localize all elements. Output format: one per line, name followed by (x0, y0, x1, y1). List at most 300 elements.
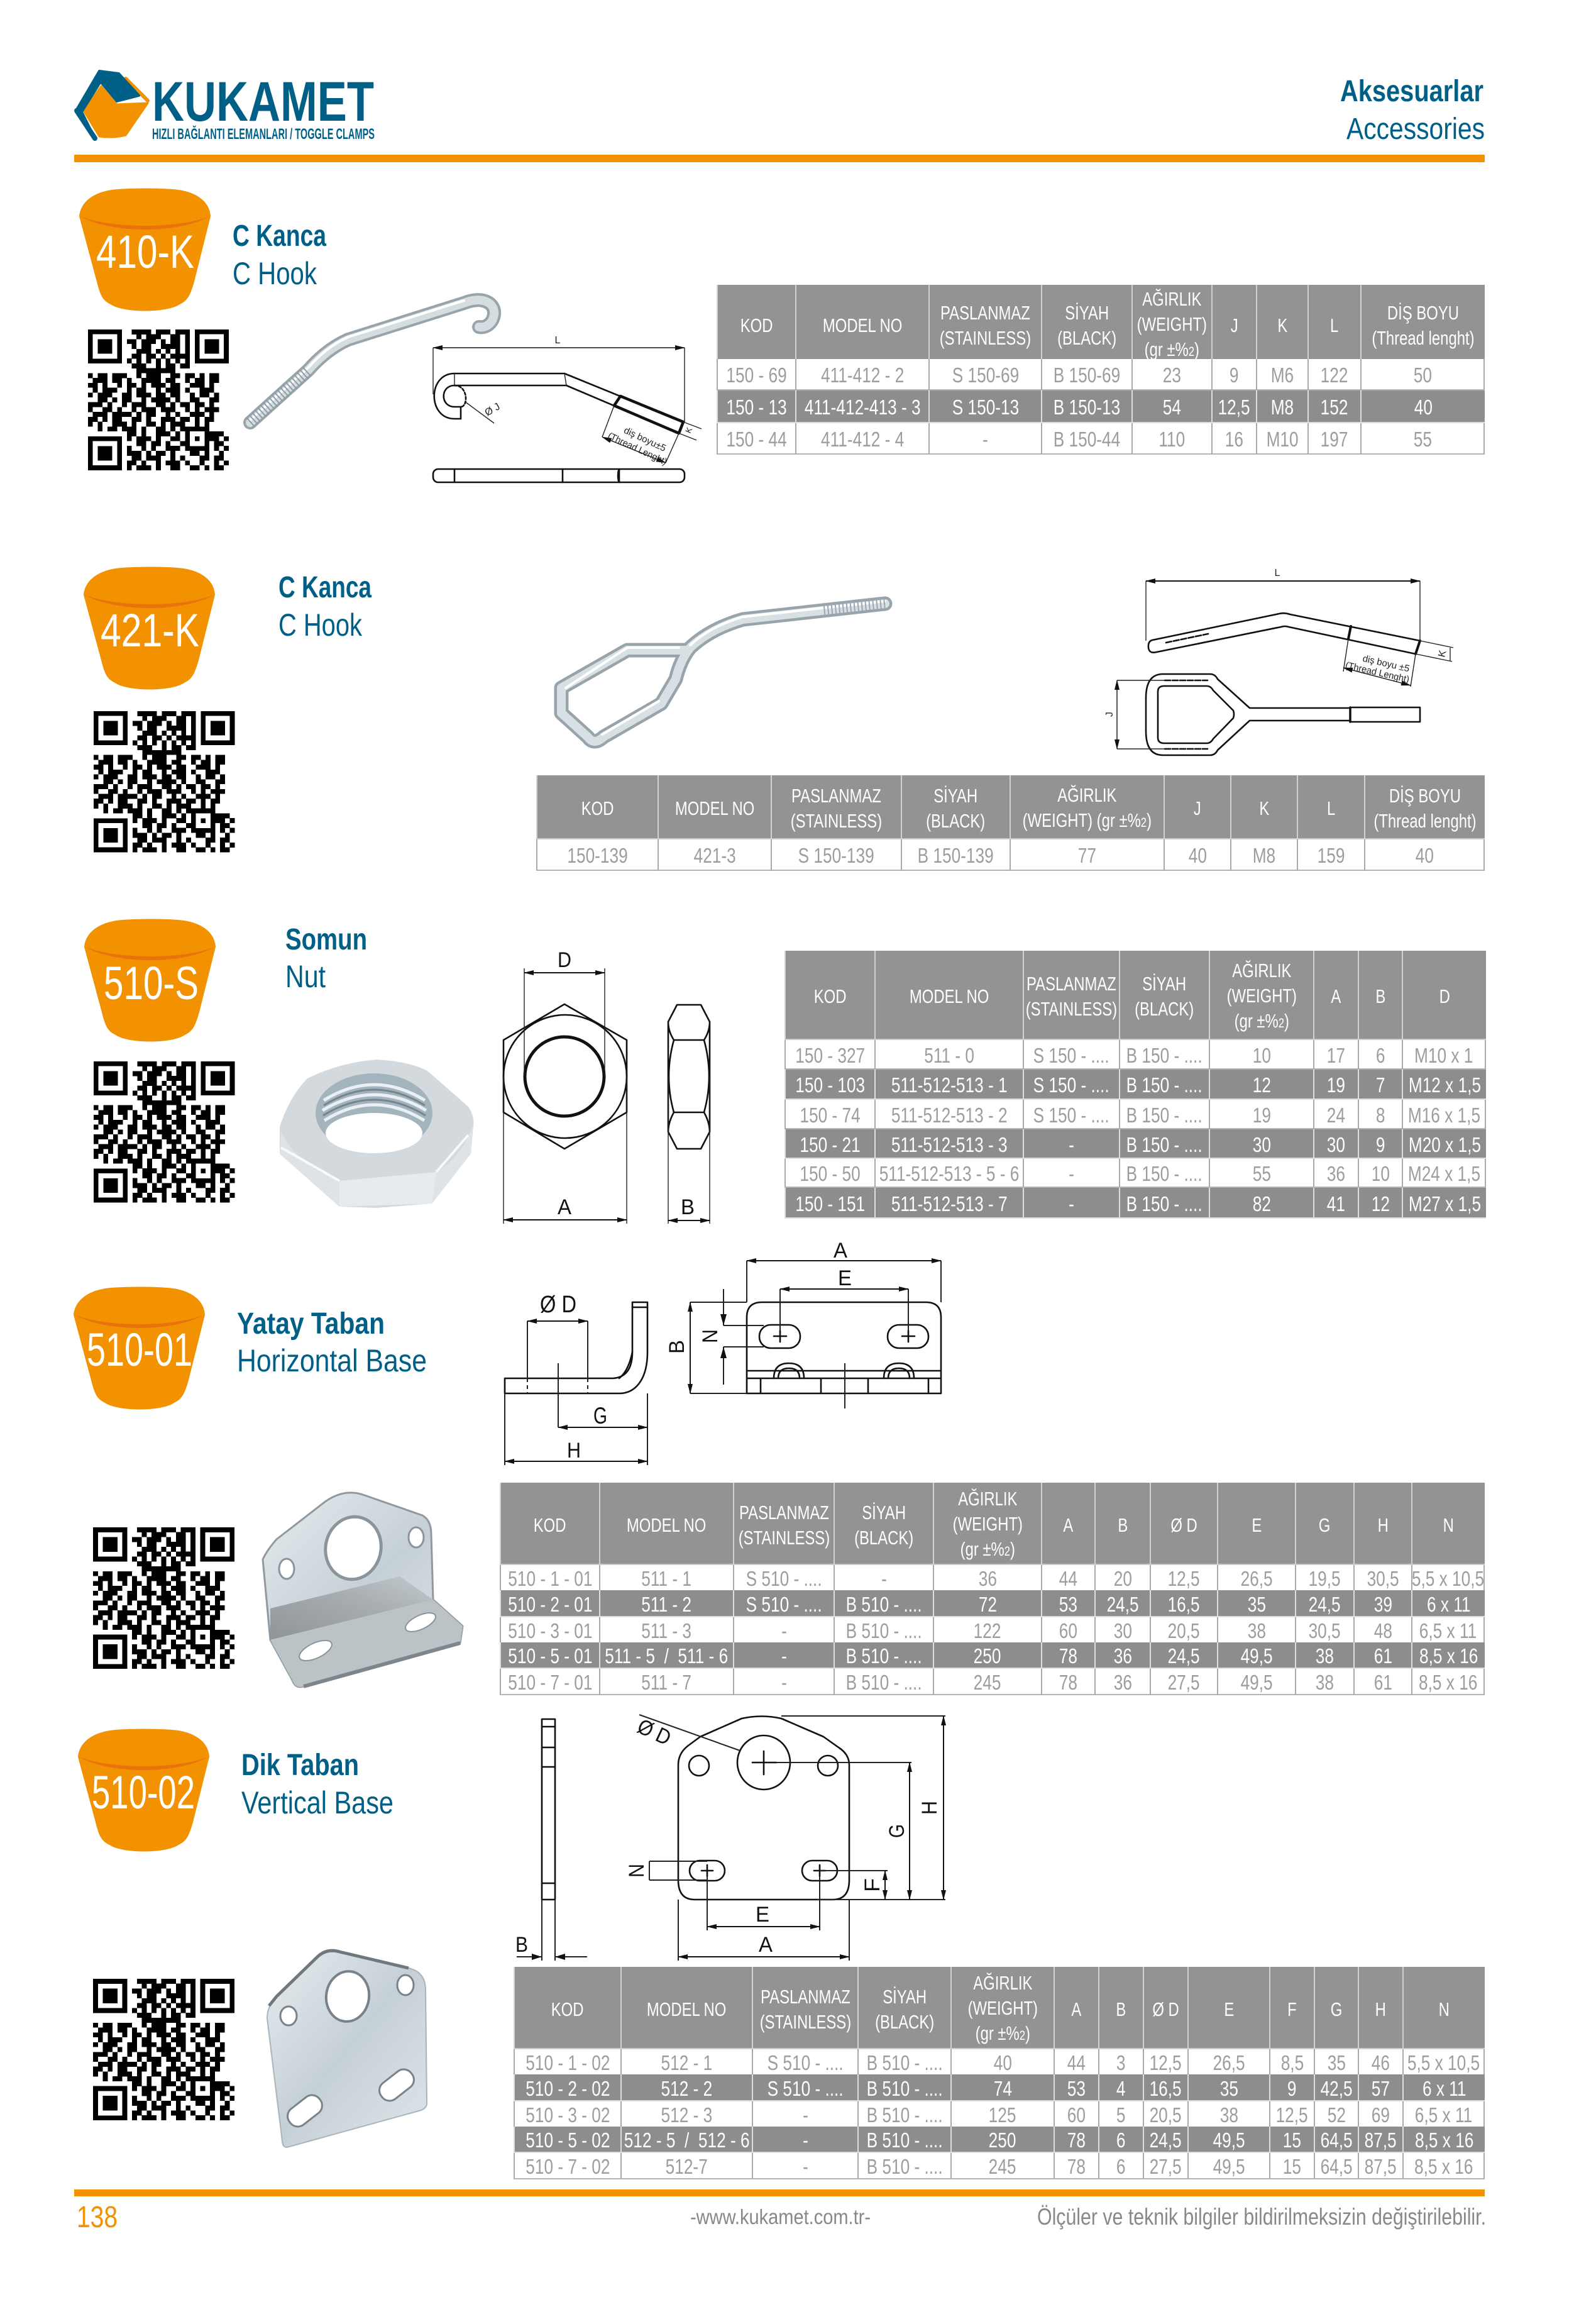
table row: 40 (1414, 396, 1433, 419)
table row: 44 (1067, 2051, 1086, 2074)
table row: 512 - 3 (661, 2103, 712, 2127)
table row: 6 x 11 (1427, 1592, 1470, 1616)
table header row: E (1224, 1998, 1234, 2020)
drawing: triangular hook: diş boyu ±5 (1362, 653, 1411, 674)
photo: triangular hook (561, 601, 885, 741)
table header row: KOD (551, 1998, 584, 2020)
table row: 35 (1327, 2051, 1346, 2074)
table row: 511-512-513 - 1 (891, 1073, 1007, 1097)
table header row (536, 775, 1485, 839)
table row: 5,5 x 10,5 (1407, 2051, 1480, 2074)
table header row: D (1439, 985, 1450, 1007)
table row: 12,5 (1276, 2103, 1308, 2127)
table row: 82 (1252, 1192, 1271, 1215)
brand name: KUKAMET (152, 70, 374, 133)
table row: 159 (1318, 844, 1345, 867)
drawing: horizontal base front view (665, 1239, 941, 1408)
table header row: N (1443, 1514, 1454, 1536)
table row (784, 1188, 1486, 1219)
table row: S 150 - .... (1033, 1044, 1109, 1066)
section: 510-02 (78, 1714, 945, 2147)
drawing: C hook: diş boyu±5 (622, 425, 668, 454)
product title (233, 219, 326, 291)
drawing: C hook: (Thread Lenght) (606, 431, 669, 467)
table row: 10 (1371, 1162, 1390, 1185)
table row: 16,5 (1150, 2076, 1182, 2100)
table header row (514, 1967, 1485, 2049)
table row: - (803, 2155, 808, 2178)
website: -www.kukamet.com.tr- (690, 2205, 871, 2228)
table row: B 150 - .... (1126, 1044, 1203, 1066)
drawing: vertical base: N (625, 1864, 649, 1878)
table row: 122 (974, 1619, 1001, 1642)
table row: 39 (1373, 1592, 1392, 1616)
table row (500, 1642, 1485, 1669)
table row: 150 - 44 (726, 428, 787, 451)
badge: 410-K: 410-K (96, 226, 194, 278)
table header row: (STAINLESS) (1026, 998, 1117, 1020)
table row: 150 - 327 (795, 1044, 865, 1066)
table row: 64,5 (1320, 2128, 1353, 2152)
table row: 411-412 - 2 (821, 363, 904, 387)
table row: 510 - 5 - 01 (508, 1644, 592, 1668)
drawing: C hook (433, 335, 702, 482)
table row: 6,5 x 11 (1415, 2103, 1472, 2127)
table row: M24 x 1,5 (1407, 1162, 1480, 1185)
table row: 49,5 (1213, 2155, 1245, 2178)
table row: 12,5 (1218, 396, 1250, 419)
table row: 12 (1252, 1073, 1271, 1097)
table row: 26,5 (1213, 2051, 1245, 2074)
table row: S 150-13 (952, 396, 1019, 419)
table row: - (1069, 1133, 1074, 1156)
table header row: N (1439, 1998, 1450, 2020)
table row: S 510 - .... (767, 2076, 844, 2100)
table header row: B (1118, 1514, 1128, 1536)
table row: 9 (1376, 1133, 1385, 1156)
table: 510-01 (500, 1483, 1485, 1695)
table header row: (Thread lenght) (1372, 327, 1475, 348)
drawing: triangular hook: L (1275, 568, 1280, 578)
table row: 511-512-513 - 2 (891, 1103, 1007, 1127)
table row: 510 - 3 - 02 (526, 2103, 610, 2127)
table row: 197 (1321, 428, 1348, 451)
table row: 87,5 (1365, 2155, 1397, 2178)
table row: 35 (1219, 2076, 1238, 2100)
table row: 510 - 1 - 01 (508, 1567, 592, 1590)
table row: M10 (1266, 428, 1299, 451)
photo: vertical base (267, 1951, 427, 2147)
table row: 61 (1373, 1671, 1392, 1694)
table header row: AĞIRLIK (973, 1972, 1032, 1994)
badge: 510-01 (74, 1287, 205, 1410)
table row: 122 (1321, 363, 1348, 387)
QR code (93, 1527, 234, 1669)
table row: 110 (1159, 428, 1185, 451)
table row: - (1069, 1192, 1074, 1215)
table row: 150 - 151 (795, 1192, 865, 1215)
table header row: (BLACK) (926, 810, 986, 832)
table row: 512 - 2 (661, 2076, 712, 2100)
table row: 19 (1252, 1103, 1271, 1127)
table row: 19,5 (1309, 1567, 1341, 1590)
drawing: horizontal base front view: A (834, 1239, 847, 1263)
table row: 510 - 7 - 02 (526, 2155, 610, 2178)
table row: - (781, 1644, 786, 1668)
table header row: K (1259, 797, 1269, 819)
table row: B 150 - .... (1126, 1103, 1203, 1127)
table row: 411-412-413 - 3 (805, 396, 920, 419)
table row: 48 (1373, 1619, 1392, 1642)
table row: 24,5 (1168, 1644, 1200, 1668)
table row: 8 (1376, 1103, 1385, 1127)
table row: 511 - 0 (924, 1044, 974, 1066)
table row: 78 (1067, 2155, 1086, 2178)
table header row: J (1194, 797, 1201, 819)
table row: 6 x 11 (1423, 2076, 1466, 2100)
table row (784, 1100, 1486, 1129)
table row: S 150-69 (952, 363, 1019, 387)
table row (784, 1159, 1486, 1188)
table: 510-02 (514, 1967, 1485, 2179)
product title: Vertical Base (241, 1785, 393, 1820)
drawing: triangular hook: J (1104, 712, 1115, 717)
table row: B 510 - .... (845, 1671, 922, 1694)
table row: M10 x 1 (1414, 1044, 1473, 1066)
table row (717, 390, 1485, 423)
table header row: A (1331, 985, 1341, 1007)
drawing: vertical base: A (759, 1933, 773, 1957)
photo: C hook (250, 300, 494, 423)
table row: M8 (1271, 396, 1294, 419)
page title (1340, 75, 1485, 146)
drawing: vertical base: E (756, 1903, 769, 1927)
table row: 36 (1113, 1644, 1132, 1668)
table row: 511 - 1 (642, 1567, 691, 1590)
table header row: (WEIGHT) (gr ±%2) (1023, 809, 1152, 831)
drawing: C hook: K (683, 426, 694, 434)
table row: 150 - 21 (800, 1133, 861, 1156)
table header row: AĞIRLIK (1232, 960, 1291, 981)
table row: 15 (1283, 2128, 1301, 2152)
product title: Horizontal Base (237, 1343, 427, 1378)
table row: 24,5 (1309, 1592, 1341, 1616)
table row: 8,5 x 16 (1415, 2128, 1473, 2152)
table header row: (BLACK) (1135, 998, 1194, 1020)
table row: 46 (1372, 2051, 1390, 2074)
table row: B 150-44 (1054, 428, 1120, 451)
badge: 421-K (84, 567, 215, 689)
table row: 44 (1059, 1567, 1077, 1590)
table row: 24 (1327, 1103, 1345, 1127)
table row: 40 (993, 2051, 1012, 2074)
table row: 245 (989, 2155, 1016, 2178)
table header row: J (1231, 314, 1238, 336)
table row: B 510 - .... (845, 1592, 922, 1616)
product title: Dik Taban (241, 1749, 359, 1782)
table row: - (881, 1567, 886, 1590)
drawing: nut: D (558, 948, 571, 972)
table header row: SİYAH (934, 785, 977, 807)
table row: S 510 - .... (746, 1592, 822, 1616)
table row: M12 x 1,5 (1408, 1073, 1481, 1097)
drawing: horizontal base side view: Ø D (540, 1292, 576, 1318)
table row: 30,5 (1367, 1567, 1399, 1590)
table row: 8,5 x 16 (1414, 2155, 1473, 2178)
table row: 53 (1067, 2076, 1086, 2100)
badge: 421-K: 421-K (101, 604, 199, 656)
table header row: MODEL NO (823, 314, 902, 336)
table row: - (803, 2103, 808, 2127)
table header row: (WEIGHT) (1137, 313, 1207, 335)
table row: 30 (1252, 1133, 1271, 1156)
table row: S 150-139 (798, 844, 874, 867)
table row: B 510 - .... (866, 2155, 943, 2178)
table row: 74 (993, 2076, 1012, 2100)
table row: 6 (1116, 2155, 1126, 2178)
table header row: MODEL NO (627, 1514, 707, 1536)
drawing: nut (504, 948, 710, 1224)
drawing: horizontal base front view: N (698, 1329, 722, 1343)
drawing: vertical base: F (861, 1878, 884, 1892)
table row: 17 (1327, 1044, 1345, 1066)
table row: - (781, 1619, 786, 1642)
table row: 57 (1372, 2076, 1390, 2100)
table header row: KOD (814, 985, 846, 1007)
table row (514, 2153, 1485, 2179)
table row (514, 2127, 1485, 2153)
table header row: A (1072, 1998, 1081, 2020)
table header row: (STAINLESS) (791, 810, 882, 832)
table row: 7 (1376, 1073, 1385, 1097)
product title: Somun (285, 923, 367, 956)
page title: Aksesuarlar (1340, 75, 1483, 108)
table row: 510 - 2 - 02 (526, 2076, 610, 2100)
table row: 24,5 (1150, 2128, 1182, 2152)
table row: S 510 - .... (746, 1567, 822, 1590)
table header row: (BLACK) (875, 2011, 934, 2032)
table row: B 150 - .... (1126, 1133, 1203, 1156)
table row: B 510 - .... (845, 1644, 922, 1668)
drawing: vertical base: H (918, 1801, 942, 1815)
table row: 512 - 1 (661, 2051, 712, 2074)
table row: 150 - 103 (795, 1073, 865, 1097)
table row: 12 (1371, 1192, 1390, 1215)
table header row: G (1319, 1514, 1331, 1536)
table header row: (STAINLESS) (738, 1527, 830, 1548)
table header row: SİYAH (883, 1986, 927, 2007)
table row: B 150-13 (1054, 396, 1120, 419)
table row: 150 - 74 (800, 1103, 861, 1127)
table row: 511-512-513 - 7 (891, 1192, 1007, 1215)
drawing: horizontal base side view: H (567, 1439, 581, 1463)
table row: 512-7 (666, 2155, 708, 2178)
table row: 78 (1059, 1644, 1077, 1668)
table header row: PASLANMAZ (1026, 973, 1116, 995)
badge: 510-S: 510-S (104, 957, 199, 1009)
table row: 52 (1327, 2103, 1346, 2127)
badge: 410-K (79, 189, 211, 311)
table row (514, 2101, 1485, 2127)
table row: 35 (1247, 1592, 1266, 1616)
table row: 421-3 (693, 844, 736, 867)
table row: 6 (1376, 1044, 1385, 1066)
table row: 510 - 2 - 01 (508, 1592, 592, 1616)
table row: 5,5 x 10,5 (1412, 1567, 1484, 1590)
table row: 511 - 7 (642, 1671, 691, 1694)
drawing: vertical base: G (885, 1824, 909, 1838)
table row: 511 - 2 (642, 1592, 691, 1616)
table row: 77 (1078, 844, 1096, 867)
table row: 27,5 (1168, 1671, 1200, 1694)
table row: 12,5 (1150, 2051, 1182, 2074)
table row: 36 (978, 1567, 997, 1590)
table row (500, 1590, 1485, 1617)
table row: B 510 - .... (845, 1619, 922, 1642)
table header row: SİYAH (1065, 302, 1109, 323)
table row: 510 - 1 - 02 (526, 2051, 610, 2074)
table row: 10 (1252, 1044, 1271, 1066)
drawing: triangular hook (1104, 568, 1453, 755)
section: 421-K (84, 567, 1453, 852)
table row: 36 (1327, 1162, 1345, 1185)
table row (514, 2049, 1485, 2074)
table header row: DİŞ BOYU (1389, 785, 1461, 807)
table row: 511 - 3 (642, 1619, 691, 1642)
QR code (94, 711, 234, 852)
table row: B 150-139 (918, 844, 994, 867)
table header row: MODEL NO (675, 797, 754, 819)
table row: 38 (1316, 1644, 1334, 1668)
table row: 30 (1113, 1619, 1132, 1642)
table header row: KOD (534, 1514, 566, 1536)
table header row: E (1252, 1514, 1262, 1536)
table header row: KOD (740, 314, 773, 336)
table row (717, 423, 1485, 455)
table row: M20 x 1,5 (1408, 1133, 1481, 1156)
table header row: L (1327, 797, 1335, 819)
drawing: horizontal base front view: B (665, 1340, 689, 1354)
table header row: (WEIGHT) (1226, 985, 1297, 1006)
table header row: H (1377, 1514, 1389, 1536)
drawing: horizontal base front view: E (838, 1266, 852, 1290)
table row: 40 (1188, 844, 1207, 867)
table row: 125 (989, 2103, 1016, 2127)
table row: 78 (1067, 2128, 1086, 2152)
table row: 4 (1116, 2076, 1126, 2100)
header rule (74, 155, 1485, 162)
table row: 9 (1230, 363, 1239, 387)
table header row: (WEIGHT) (952, 1513, 1023, 1535)
table row: 150 - 13 (726, 396, 787, 419)
badge: 510-02 (78, 1729, 209, 1851)
table header row: F (1287, 1998, 1297, 2020)
page title: Accessories (1346, 113, 1485, 146)
product title: C Hook (278, 607, 363, 643)
table row: 512 - 5 / 512 - 6 (624, 2128, 749, 2152)
table row: S 510 - .... (767, 2051, 844, 2074)
table header row: SİYAH (862, 1502, 906, 1523)
table row: 61 (1373, 1644, 1392, 1668)
table row: 511-512-513 - 5 - 6 (879, 1162, 1019, 1185)
table row: 40 (1415, 844, 1434, 867)
table row: 87,5 (1365, 2128, 1397, 2152)
table row: 510 - 7 - 01 (508, 1671, 592, 1694)
table row: 8,5 (1280, 2051, 1304, 2074)
QR code (88, 329, 229, 470)
table header row: PASLANMAZ (791, 785, 881, 807)
table row: 69 (1372, 2103, 1390, 2127)
table row: - (982, 428, 988, 451)
table row: 15 (1283, 2155, 1301, 2178)
table header row: G (1331, 1998, 1342, 2020)
table row: 20 (1113, 1567, 1132, 1590)
table row: 511 - 5 / 511 - 6 (605, 1644, 728, 1668)
table row: B 510 - .... (866, 2128, 943, 2152)
table header row: (WEIGHT) (967, 1997, 1038, 2019)
logo (76, 70, 375, 143)
drawing: horizontal base side view (505, 1292, 647, 1465)
table header row: MODEL NO (910, 985, 989, 1007)
badge: 510-01: 510-01 (87, 1324, 192, 1376)
table row: 60 (1067, 2103, 1086, 2127)
table row: 26,5 (1240, 1567, 1273, 1590)
table header row: PASLANMAZ (739, 1502, 828, 1523)
table row: - (781, 1671, 786, 1694)
table row: 64,5 (1320, 2155, 1353, 2178)
brand tagline: HIZLI BAĞLANTI ELEMANLARI / TOGGLE CLAMPS (152, 125, 375, 143)
table header row: PASLANMAZ (940, 302, 1030, 323)
table row: B 150 - .... (1126, 1162, 1203, 1185)
table: 421-K (536, 775, 1485, 871)
table: 510-S (784, 951, 1486, 1219)
table row: 3 (1116, 2051, 1126, 2074)
badge: 510-S (84, 919, 216, 1041)
product title: C Hook (233, 256, 317, 291)
table header row: L (1330, 314, 1339, 336)
table row (784, 1040, 1486, 1070)
table header row: AĞIRLIK (958, 1488, 1017, 1510)
table header row: H (1375, 1998, 1386, 2020)
table row: 250 (974, 1644, 1001, 1668)
table row: 19 (1327, 1073, 1345, 1097)
table row: 23 (1163, 363, 1181, 387)
table row: 250 (989, 2128, 1016, 2152)
drawing: nut: B (681, 1195, 695, 1219)
table row: 16,5 (1168, 1592, 1200, 1616)
table row: 411-412 - 4 (821, 428, 904, 451)
table header row: SİYAH (1143, 973, 1186, 995)
table row: 54 (1163, 396, 1181, 419)
table row: 42,5 (1320, 2076, 1353, 2100)
footer rule (74, 2189, 1485, 2196)
table row: 60 (1059, 1619, 1077, 1642)
table header row (500, 1483, 1485, 1565)
table row: M27 x 1,5 (1408, 1192, 1481, 1215)
table row: 78 (1059, 1671, 1077, 1694)
table row: 150 - 50 (800, 1162, 861, 1185)
table header row: (gr ±%2) (960, 1538, 1015, 1560)
table row: B 510 - .... (866, 2051, 943, 2074)
photo: horizontal base (263, 1493, 463, 1687)
table header row: (BLACK) (1057, 327, 1116, 348)
QR code (94, 1061, 234, 1202)
icon: logo mark (76, 71, 148, 138)
table row: - (1069, 1162, 1074, 1185)
page number: 138 (77, 2201, 118, 2234)
table row (500, 1669, 1485, 1695)
table header row: K (1277, 314, 1287, 336)
